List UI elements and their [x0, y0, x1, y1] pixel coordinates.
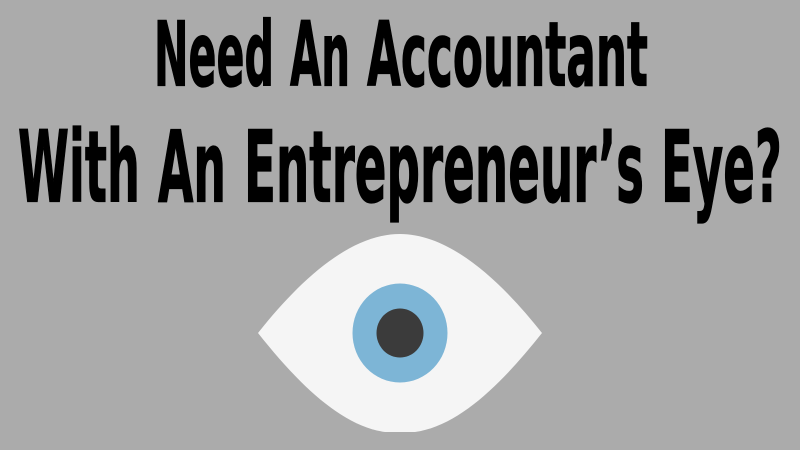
title line 2: An [158, 110, 226, 226]
title line 1: An [290, 2, 350, 106]
title line 1: Need [154, 2, 274, 106]
title line 2 [18, 110, 782, 226]
iris [352, 284, 448, 382]
pupil [376, 308, 424, 358]
title line 1 [154, 2, 648, 106]
eye white [258, 234, 542, 432]
title [18, 2, 782, 226]
icon: eye [258, 234, 542, 432]
title line 2: With [18, 110, 140, 226]
